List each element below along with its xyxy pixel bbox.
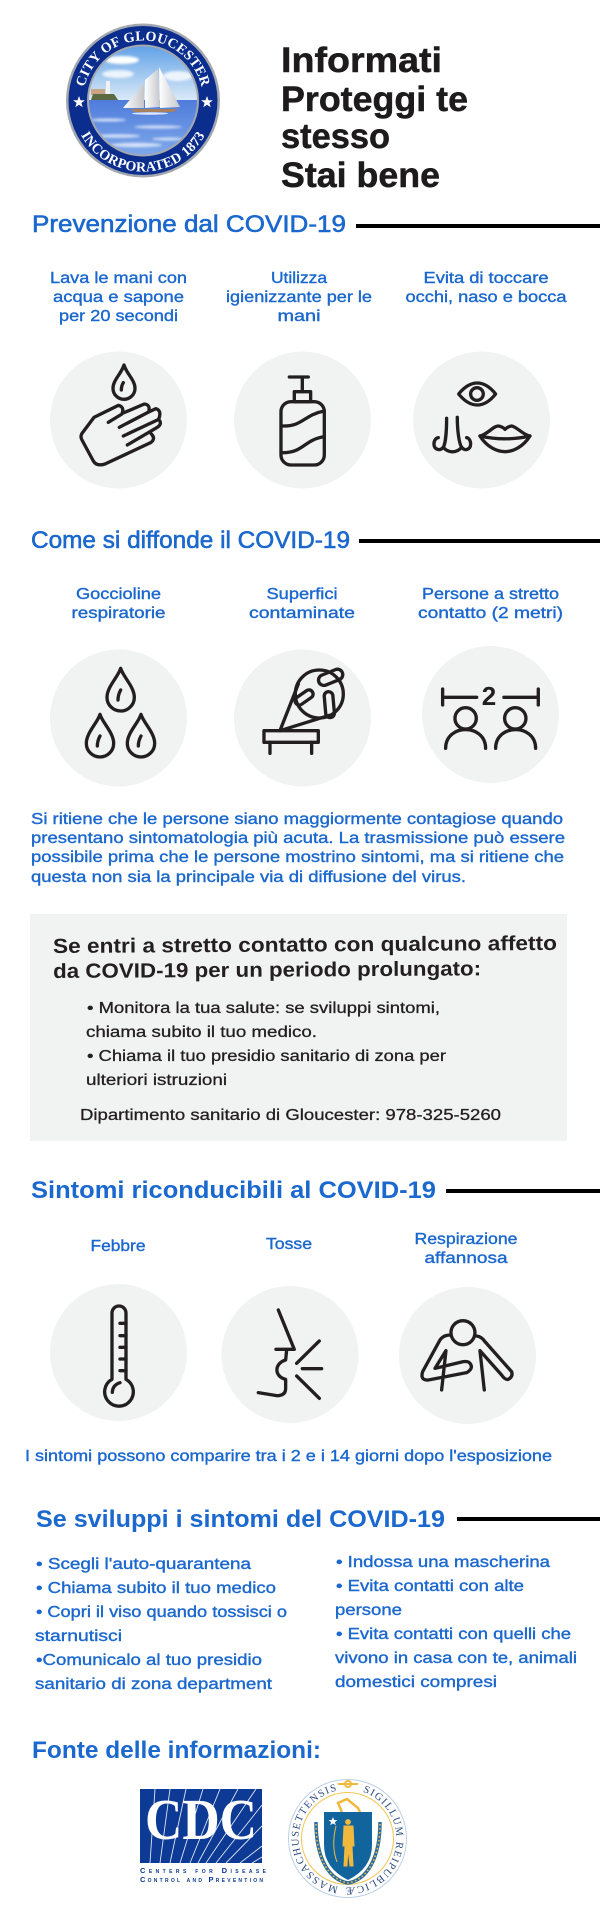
panel phone contact: Dipartimento sanitario di Gloucester: 978-325-5260	[80, 1107, 501, 1124]
title: Stai bene	[281, 156, 440, 195]
label: wash hands: acqua e sapone	[53, 289, 184, 306]
list: actions left column: • Chiama subito il tuo medico	[36, 1580, 276, 1597]
list: actions right column: persone	[335, 1602, 402, 1619]
heading: Prevenzione dal COVID-19: Prevenzione dal COVID-19	[32, 211, 346, 238]
logo: Massachusetts state seal: SIGILLUM	[364, 1786, 404, 1836]
list: actions left column: • Copri il viso quando tossisci o	[36, 1604, 287, 1621]
city of Gloucester seal logo: INCORPORATED 1873	[81, 130, 204, 172]
logo: CDC	[140, 1787, 267, 1884]
panel bullet list: ulteriori istruzioni	[86, 1072, 227, 1089]
label: wash hands	[50, 270, 187, 325]
heading: Come si diffonde il COVID-19	[31, 527, 600, 554]
label: respiratory droplets: Goccioline	[76, 586, 161, 603]
title: stesso	[281, 117, 390, 156]
panel bullet list: chiama subito il tuo medico.	[86, 1024, 317, 1041]
label: cough: Tosse	[266, 1236, 312, 1253]
label: sanitizer: igienizzante per le	[226, 289, 372, 306]
paragraph: contagiousness	[31, 811, 565, 886]
title: Informati	[281, 41, 442, 80]
panel bullet list: • Monitora la tua salute: se sviluppi sintomi,	[87, 1000, 440, 1017]
heading: sources: Fonte delle informazioni:	[32, 1737, 321, 1764]
logo: CDC: Control and Prevention	[140, 1875, 263, 1884]
paragraph: contagiousness: questa non sia la principale via di diffusione del virus.	[31, 869, 466, 886]
label: wash hands: per 20 secondi	[59, 308, 178, 325]
label: wash hands: Lava le mani con	[50, 270, 187, 287]
label: shortness of breath	[414, 1231, 518, 1267]
icon: hand and water drop	[50, 352, 187, 488]
panel: close contact advice	[30, 914, 567, 1141]
logo: Massachusetts state seal	[288, 1779, 407, 1898]
logo: CDC: CDC	[145, 1787, 257, 1852]
label: contaminated surfaces	[249, 586, 355, 622]
label: close contact: contatto (2 metri)	[418, 605, 563, 622]
label: respiratory droplets: respiratorie	[72, 605, 166, 622]
list: actions left column: •Comunicalo al tuo presidio	[36, 1652, 262, 1669]
panel heading	[53, 932, 557, 983]
icon: two people two metres apart: 2	[482, 681, 496, 711]
panel heading: Se entri a stretto contatto con qualcuno affetto	[53, 932, 557, 958]
city of Gloucester seal logo	[66, 24, 220, 178]
label: contaminated surfaces: contaminate	[249, 605, 355, 622]
icon: three droplets	[50, 650, 187, 786]
heading: Sintomi riconducibili al COVID-19: Sintomi riconducibili al COVID-19	[31, 1177, 436, 1204]
text: symptom onset: I sintomi possono comparire tra i 2 e i 14 giorni dopo l'esposizione	[25, 1448, 552, 1465]
panel bullet list	[86, 1000, 447, 1089]
list: actions right column: • Evita contatti con alte	[336, 1578, 524, 1595]
label: shortness of breath: affannosa	[424, 1250, 508, 1267]
heading: Come si diffonde il COVID-19: Come si diffonde il COVID-19	[31, 527, 350, 554]
icon: sanitizer bottle	[234, 352, 371, 488]
logo: CDC: Centers for Disease	[140, 1866, 267, 1875]
logo: Massachusetts state seal: REIPUBLICÆ	[346, 1842, 404, 1894]
label: contaminated surfaces: Superfici	[266, 586, 338, 603]
label: close contact	[418, 586, 563, 622]
title: Proteggi te	[281, 80, 468, 119]
icon: thermometer	[50, 1284, 187, 1421]
list: actions right column: • Indossa una mascherina	[336, 1554, 550, 1571]
label: avoid touching face	[406, 270, 567, 306]
list: actions right column: • Evita contatti con quelli che	[336, 1626, 571, 1643]
label: sanitizer: Utilizza	[271, 270, 327, 287]
label: avoid touching face: occhi, naso e bocca	[406, 289, 567, 306]
label: sanitizer	[226, 270, 372, 325]
label: avoid touching face: Evita di toccare	[424, 270, 549, 287]
city of Gloucester seal logo: CITY OF GLOUCESTER	[76, 31, 210, 87]
paragraph: contagiousness: possibile prima che le persone mostrino sintomi, ma si ritiene che	[31, 849, 564, 866]
icon: coughing face	[222, 1286, 358, 1423]
paragraph: contagiousness: presentano sintomatologia più acuta. La trasmissione può essere	[31, 830, 565, 847]
heading: Prevenzione dal COVID-19	[32, 211, 600, 238]
label: close contact: Persone a stretto	[422, 586, 559, 603]
list: actions right column: vivono in casa con te, animali	[335, 1650, 577, 1667]
title	[281, 41, 468, 195]
icon: virus on contaminated surface	[234, 650, 371, 786]
label: sanitizer: mani	[278, 308, 320, 325]
heading: Se sviluppi i sintomi del COVID-19: Se sviluppi i sintomi del COVID-19	[36, 1506, 445, 1533]
list: actions left column: sanitario di zona department	[35, 1676, 273, 1693]
label: shortness of breath: Respirazione	[414, 1231, 518, 1248]
icon: person short of breath	[399, 1287, 536, 1424]
list: actions left column: • Scegli l'auto-quarantena	[36, 1556, 251, 1573]
list: actions right column	[335, 1554, 577, 1691]
list: actions right column: domestici compresi	[335, 1674, 497, 1691]
logo: Massachusetts state seal: MASSACHUSETTENSIS	[292, 1784, 338, 1894]
panel bullet list: • Chiama il tuo presidio sanitario di zona per	[87, 1048, 447, 1065]
list: actions left column	[35, 1556, 287, 1693]
icon: two people two metres apart	[422, 646, 559, 783]
heading: Sintomi riconducibili al COVID-19	[31, 1177, 600, 1204]
panel heading: da COVID-19 per un periodo prolungato:	[53, 957, 481, 983]
list: actions left column: starnutisci	[35, 1628, 122, 1645]
icon: eye, nose and mouth	[413, 352, 550, 488]
paragraph: contagiousness: Si ritiene che le persone siano maggiormente contagiose quando	[31, 811, 563, 828]
label: fever: Febbre	[90, 1238, 146, 1255]
label: respiratory droplets	[72, 586, 166, 622]
